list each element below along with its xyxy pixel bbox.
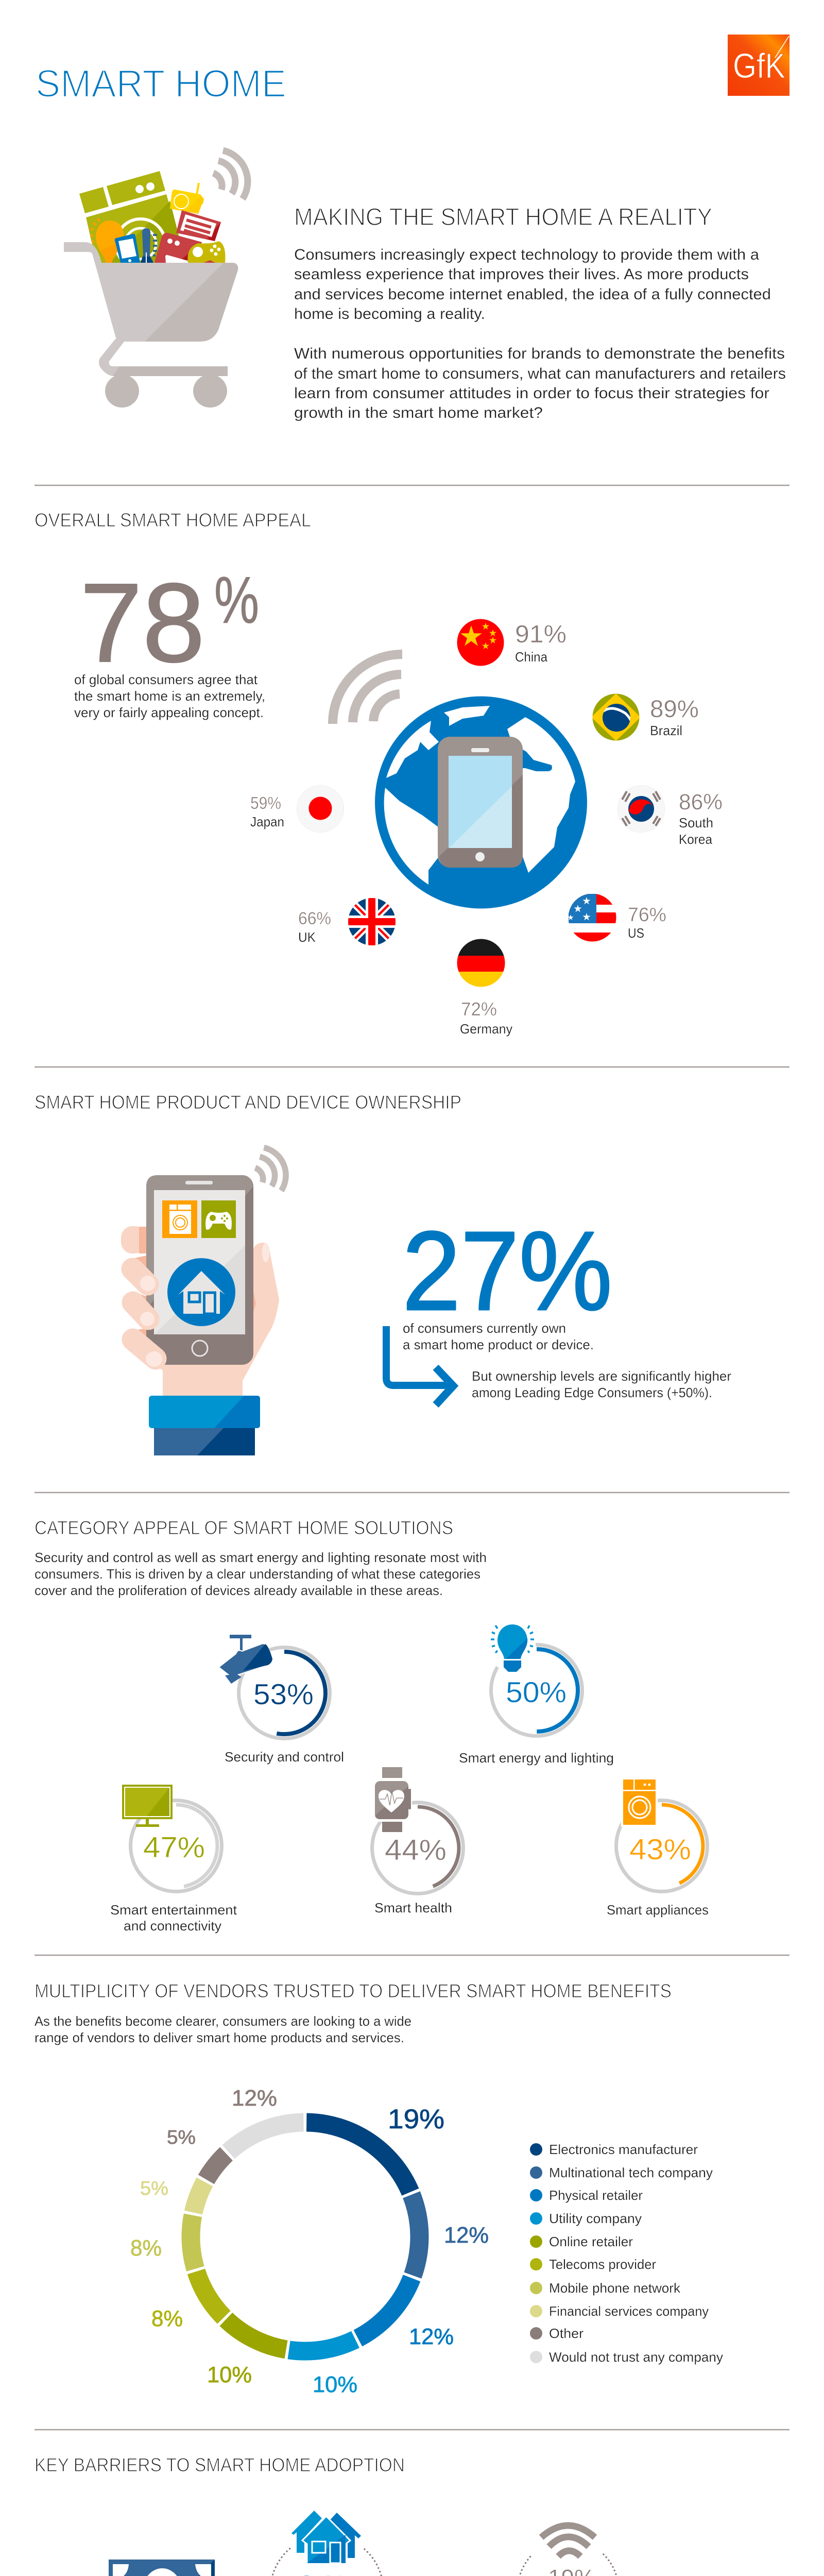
label: South Korea	[679, 790, 723, 847]
icon: houses	[291, 2511, 361, 2563]
chart: smart appliances 43%: 43%	[629, 1833, 691, 1866]
chart labels: donut percentages: 12%	[444, 2223, 489, 2248]
icon: shopping cart full of smart devices	[64, 150, 248, 408]
label: Brazil	[650, 695, 699, 738]
label: smart health: Smart health	[374, 1900, 452, 1916]
icon: phone body	[146, 1175, 253, 1365]
chart: smart health 44%: 44%	[385, 1834, 447, 1867]
label: Germany: Germany	[460, 1021, 512, 1037]
stat: 78%	[80, 561, 259, 686]
chart labels: donut percentages: 8%	[151, 2306, 183, 2331]
flag: Brazil	[591, 693, 641, 741]
flag: UK	[348, 898, 396, 945]
icon: light bulb	[90, 218, 124, 263]
text: category intro: Security and control as well as smart energy and lighting resonate most with	[35, 1550, 487, 1565]
icon: large wifi arcs	[333, 654, 402, 724]
icon: wifi signal	[213, 150, 248, 199]
flag: South Korea	[618, 785, 664, 833]
icon: hand holding smartphone	[121, 1147, 286, 1455]
text: 78% description: very or fairly appealing concept.	[74, 705, 264, 720]
legend: Would not trust any company	[549, 2349, 723, 2365]
icon: palm and thumb	[149, 1243, 279, 1397]
logo: GfK	[728, 35, 789, 96]
heading: category appeal: CATEGORY APPEAL OF SMART HOME SOLUTIONS	[35, 1517, 453, 1538]
label: UK: 66%	[298, 909, 331, 928]
text: leading edge: among Leading Edge Consumers (+50%).	[472, 1385, 712, 1400]
label: Brazil: 89%	[650, 695, 699, 722]
barrier: tech communicating	[518, 2526, 619, 2576]
chart: smart energy and lighting 50%: 50%	[506, 1676, 566, 1709]
label: South Korea: 86%	[679, 790, 723, 815]
label: US: 76%	[628, 904, 666, 926]
label: US	[628, 904, 666, 941]
icon: wifi	[541, 2526, 595, 2556]
label: Japan: Japan	[250, 814, 284, 829]
intro text: growth in the smart home market?	[294, 404, 543, 421]
label: Japan	[250, 793, 284, 829]
legend: Financial services company	[549, 2303, 709, 2319]
chart: security and control 53%: 53%	[253, 1678, 314, 1711]
legend: Physical retailer	[549, 2188, 643, 2203]
text: 78% description: of global consumers agree that	[74, 672, 258, 687]
chart: security and control 53%	[219, 1635, 330, 1738]
icon: washer tile	[162, 1200, 197, 1238]
text: leading edge	[472, 1368, 731, 1400]
chart labels: donut percentages: 8%	[130, 2235, 162, 2261]
flag: Japan	[297, 785, 344, 833]
icon: thermostat tool	[141, 228, 157, 263]
legend	[530, 2142, 723, 2365]
logo: GfK: GfK	[733, 46, 785, 86]
label: UK	[298, 909, 331, 945]
heading: key barriers: KEY BARRIERS TO SMART HOME ADOPTION	[35, 2454, 405, 2476]
label: entertainment: and connectivity	[124, 1918, 221, 1934]
legend: Mobile phone network	[549, 2280, 681, 2296]
icon: wifi signal on phone	[255, 1147, 286, 1191]
label: security and control: Security and control	[225, 1749, 344, 1765]
legend: Electronics manufacturer	[549, 2142, 698, 2157]
icon: monitor	[122, 1785, 173, 1827]
chart labels: donut percentages: 10%	[207, 2362, 252, 2387]
text: ownership: of consumers currently own	[403, 1320, 566, 1336]
label: Germany: 72%	[461, 998, 497, 1020]
intro text: of the smart home to consumers, what can manufacturers and retailers	[294, 365, 786, 382]
text: 78% description	[74, 672, 265, 720]
label: Brazil: Brazil	[650, 723, 682, 738]
label: South Korea: South	[679, 815, 713, 831]
label: smart energy: Smart energy and lighting	[459, 1750, 614, 1766]
icon: security camera	[219, 1635, 272, 1684]
label: UK: UK	[298, 929, 316, 945]
chart labels: donut percentages: 12%	[409, 2324, 454, 2349]
icon: fingers	[121, 1226, 162, 1367]
chart labels: donut percentages	[130, 2086, 489, 2397]
chart: smart entertainment 47%	[122, 1785, 221, 1892]
icon: light bulb	[489, 1624, 536, 1672]
chart labels: donut percentages: 10%	[313, 2372, 357, 2397]
stat: 78%: 78	[80, 561, 205, 686]
text: ownership: a smart home product or device.	[403, 1337, 594, 1352]
icon: newspaper	[176, 210, 221, 241]
label: China: China	[515, 649, 547, 665]
intro text: With numerous opportunities for brands to demonstrate the benefits	[294, 345, 785, 362]
label: entertainment	[110, 1902, 237, 1934]
label: Germany	[460, 998, 512, 1037]
icon: smart watch	[372, 1767, 412, 1832]
heading: making the smart home a reality: MAKING THE SMART HOME A REALITY	[294, 203, 712, 230]
text: 78% description: the smart home is an extremely,	[74, 688, 265, 704]
label: China	[515, 621, 566, 665]
icon: game controller	[187, 241, 226, 263]
label: US: US	[628, 925, 644, 941]
chart: smart energy and lighting 50%	[489, 1624, 582, 1736]
intro text: home is becoming a reality.	[294, 306, 485, 323]
intro text: Consumers increasingly expect technology to provide them with a	[294, 246, 759, 263]
flag: US	[568, 894, 616, 942]
intro text	[294, 246, 786, 421]
icon: controller tile	[201, 1200, 236, 1238]
chart labels: donut percentages: 12%	[232, 2086, 277, 2111]
text: vendors intro: range of vendors to deliver smart home products and services.	[35, 2030, 404, 2045]
chart labels: donut percentages: 19%	[388, 2104, 444, 2134]
stat: 78%: %	[214, 564, 259, 637]
label: China: 91%	[515, 621, 566, 648]
label: South Korea: Korea	[679, 832, 712, 847]
text: vendors intro: As the benefits become clearer, consumers are looking to a wide	[35, 2013, 411, 2029]
chart labels: donut percentages: 5%	[140, 2178, 168, 2199]
label: Japan: 59%	[250, 793, 281, 812]
icon: banknote and coins	[108, 2560, 215, 2576]
legend: Multinational tech company	[549, 2165, 713, 2180]
chart: smart appliances 43%	[616, 1777, 708, 1892]
text: ownership	[403, 1320, 594, 1352]
text: category intro: consumers. This is driven by a clear understanding of what these categories	[35, 1566, 480, 1582]
barrier: cost to purchase	[79, 2560, 243, 2576]
stat: 27%: 27%	[402, 1209, 612, 1334]
heading: ownership: SMART HOME PRODUCT AND DEVICE OWNERSHIP	[35, 1092, 461, 1113]
text: vendors intro	[35, 2013, 411, 2045]
chart: smart entertainment 47%: 47%	[143, 1831, 205, 1864]
icon: globe with smartphone	[375, 697, 587, 909]
chart: smart health 44%	[372, 1767, 464, 1894]
icon: cart body	[64, 242, 238, 408]
icon: cuff and sleeve	[149, 1396, 260, 1455]
flag: China	[457, 619, 504, 666]
icon: smartphone	[115, 234, 140, 263]
legend: Telecoms provider	[549, 2257, 656, 2272]
heading: multiplicity of vendors: MULTIPLICITY OF VENDORS TRUSTED TO DELIVER SMART HOME BENEFITS	[35, 1980, 672, 2002]
icon: red tablet device	[154, 233, 202, 263]
text: category intro	[35, 1550, 487, 1598]
heading: overall smart home appeal: OVERALL SMART HOME APPEAL	[35, 510, 311, 531]
chart: donut of trusted vendors	[191, 2123, 419, 2351]
icon: washing machine	[621, 1777, 658, 1827]
legend: Utility company	[549, 2211, 642, 2226]
intro text: seamless experience that improves their lives. As more products	[294, 266, 749, 283]
flag: Germany	[457, 939, 505, 988]
legend: Other	[549, 2326, 583, 2341]
chart labels: donut percentages: 5%	[167, 2127, 196, 2148]
label: entertainment: Smart entertainment	[110, 1902, 237, 1918]
icon: radio	[170, 183, 204, 214]
text: leading edge: But ownership levels are significantly higher	[472, 1368, 731, 1384]
intro text: learn from consumer attitudes in order to focus their strategies for	[294, 385, 769, 402]
icon: washing machine	[79, 171, 182, 268]
intro text: and services become internet enabled, the idea of a fully connected	[294, 286, 771, 303]
arrow	[386, 1326, 453, 1405]
label: smart appliances: Smart appliances	[607, 1902, 709, 1918]
barrier: personal privacy	[270, 2511, 384, 2576]
legend: Online retailer	[549, 2234, 633, 2249]
text: category intro: cover and the proliferation of devices already available in these areas.	[35, 1583, 443, 1598]
icon: smartphone on globe	[438, 737, 523, 868]
title: SMART HOME	[36, 62, 286, 105]
icon: home circle	[167, 1258, 235, 1326]
